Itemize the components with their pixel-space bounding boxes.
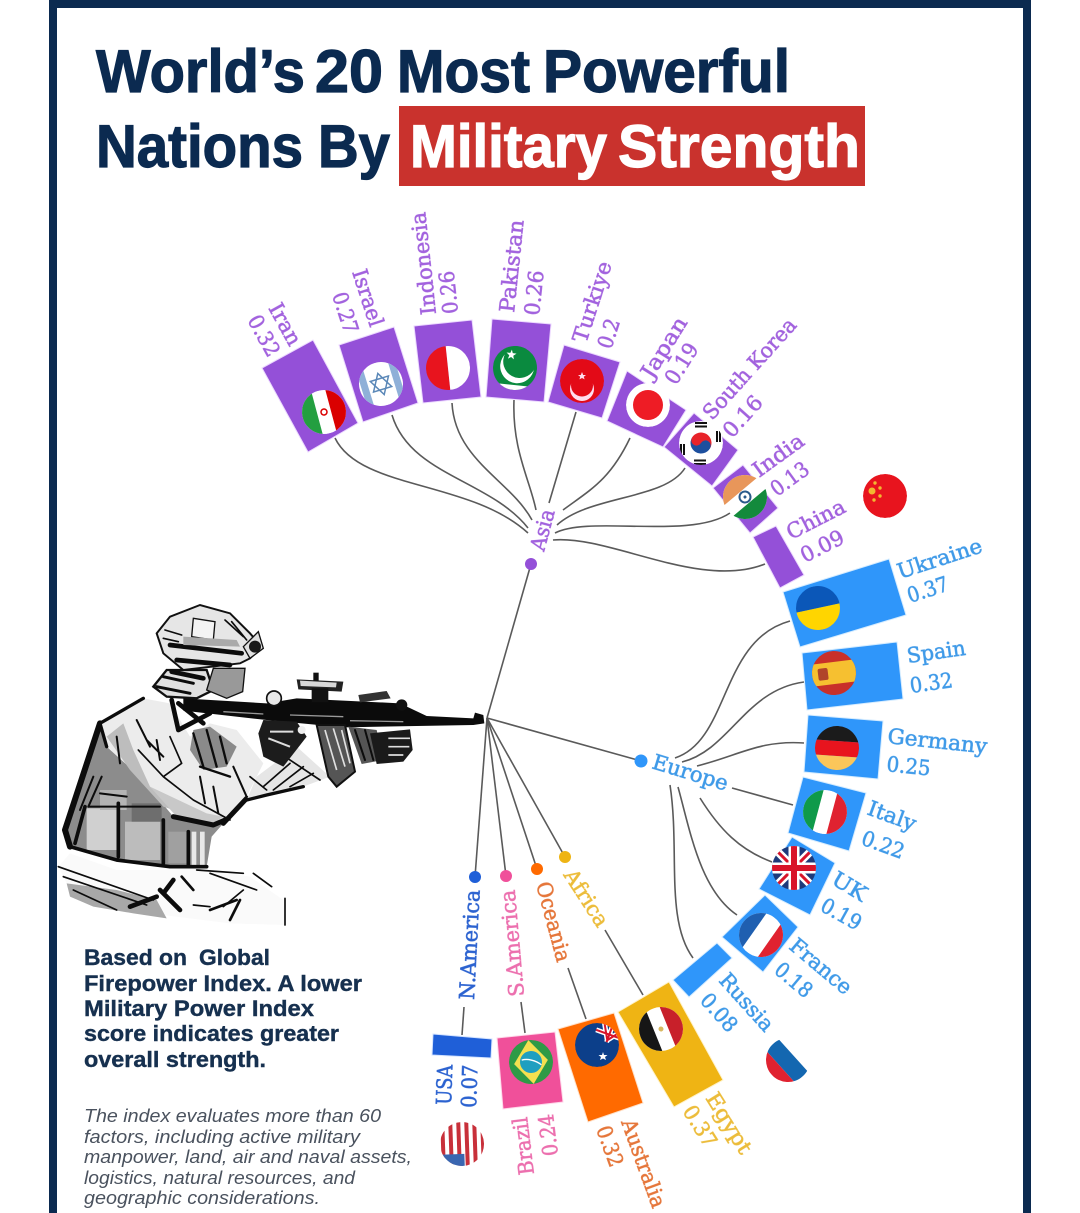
note: methodology xyxy=(84,1106,412,1208)
group nodes and labels: N.America xyxy=(455,889,485,1000)
Germany: 0.25 xyxy=(885,752,932,781)
Indonesia: Indonesia xyxy=(406,211,441,316)
illustration: soldier aiming a rifle xyxy=(58,605,484,925)
India xyxy=(712,438,809,534)
UK xyxy=(759,837,872,935)
Spain xyxy=(802,636,967,710)
torso xyxy=(100,698,263,823)
Turkiye: 0.2 xyxy=(593,316,625,352)
China xyxy=(753,474,907,588)
Iran xyxy=(243,299,358,452)
Pakistan: Pakistan xyxy=(495,219,529,314)
India: India xyxy=(748,429,809,482)
note: index explanation: Military Power Index xyxy=(84,996,315,1021)
Spain: 0.32 xyxy=(908,668,954,698)
note: index explanation: overall strength. xyxy=(84,1047,266,1072)
note: index explanation: score indicates greater xyxy=(84,1021,339,1046)
UK: UK xyxy=(827,867,872,907)
title: World’s xyxy=(96,38,305,105)
Brazil xyxy=(497,1032,563,1176)
right hand xyxy=(370,729,413,764)
Ukraine xyxy=(783,534,985,647)
France: France xyxy=(785,933,857,999)
China: China xyxy=(782,494,849,544)
Pakistan xyxy=(486,219,551,402)
Egypt: Egypt xyxy=(701,1088,757,1159)
South Korea xyxy=(664,313,801,486)
USA: USA xyxy=(432,1064,457,1105)
note: methodology: The index evaluates more than 60 xyxy=(84,1106,381,1126)
note: index explanation: Based on xyxy=(84,945,187,970)
India: 0.13 xyxy=(766,457,814,501)
title: Powerful xyxy=(543,38,790,105)
note: index explanation: Global xyxy=(199,945,270,970)
South Korea: 0.16 xyxy=(718,391,768,442)
Italy xyxy=(788,777,920,864)
group nodes and labels xyxy=(455,507,731,1000)
Indonesia: 0.26 xyxy=(435,270,463,315)
radial bar chart xyxy=(243,211,989,1211)
Italy: Italy xyxy=(864,796,920,836)
note: index explanation: Firepower Index. A lower xyxy=(84,971,362,996)
title xyxy=(96,38,865,186)
Japan xyxy=(606,320,697,448)
Israel xyxy=(327,266,418,422)
France: 0.18 xyxy=(770,957,817,1003)
Brazil: Brazil xyxy=(508,1116,539,1176)
Ukraine: Ukraine xyxy=(894,534,985,584)
note: index explanation xyxy=(84,945,362,1072)
connector lines xyxy=(335,400,804,1035)
Russia: 0.08 xyxy=(695,988,743,1037)
China: 0.09 xyxy=(796,525,848,567)
Indonesia xyxy=(406,211,481,403)
Iran: 0.32 xyxy=(243,311,285,361)
Iran: Iran xyxy=(264,299,306,350)
Israel: 0.27 xyxy=(327,289,363,336)
title: Most xyxy=(397,38,530,105)
Russia xyxy=(672,942,808,1082)
Germany: Germany xyxy=(886,724,989,758)
rifle xyxy=(183,698,484,727)
group nodes and labels: Asia xyxy=(525,507,560,554)
group nodes and labels: Oceania xyxy=(531,879,576,965)
Turkiye: Turkiye xyxy=(568,258,617,346)
Australia: Australia xyxy=(616,1115,671,1211)
title: 20 xyxy=(315,38,383,105)
Japan: Japan xyxy=(635,312,692,385)
note: methodology: logistics, natural resources, and xyxy=(84,1168,356,1188)
France xyxy=(722,895,857,1003)
forearm xyxy=(247,747,330,800)
Brazil: 0.24 xyxy=(534,1113,563,1157)
USA xyxy=(432,1034,492,1167)
Italy: 0.22 xyxy=(858,826,908,864)
note: methodology: geographic considerations. xyxy=(84,1188,320,1208)
group nodes and labels: Europe xyxy=(650,750,731,796)
ground sketch xyxy=(58,853,285,925)
South Korea: South Korea xyxy=(698,313,801,424)
group nodes and labels: Africa xyxy=(558,864,614,931)
note: methodology: manpower, land, air and naval assets, xyxy=(84,1147,412,1167)
Japan: 0.19 xyxy=(660,339,704,389)
title: Military xyxy=(410,113,608,180)
Australia xyxy=(558,1013,671,1211)
Russia: Russia xyxy=(714,968,779,1036)
group nodes and labels: S.America xyxy=(496,889,529,998)
title: Nations xyxy=(96,113,303,180)
UK: 0.19 xyxy=(817,893,866,935)
title: Strength xyxy=(618,113,860,180)
Spain: Spain xyxy=(905,636,967,668)
magazine xyxy=(317,725,355,787)
webbing and pouches xyxy=(63,723,223,867)
strap xyxy=(172,700,210,730)
Egypt xyxy=(618,982,757,1159)
title: By xyxy=(318,113,391,180)
left hand xyxy=(258,720,307,767)
Turkiye xyxy=(548,258,625,418)
Australia: 0.32 xyxy=(591,1123,628,1170)
USA: 0.07 xyxy=(457,1064,482,1108)
Egypt: 0.37 xyxy=(678,1101,722,1152)
scarf and mask xyxy=(153,670,213,698)
note: methodology: factors, including active military xyxy=(84,1127,361,1147)
Israel: Israel xyxy=(347,266,388,330)
Ukraine: 0.37 xyxy=(904,572,951,608)
helmet xyxy=(157,605,262,670)
Pakistan: 0.26 xyxy=(520,269,549,317)
Germany xyxy=(804,715,989,781)
